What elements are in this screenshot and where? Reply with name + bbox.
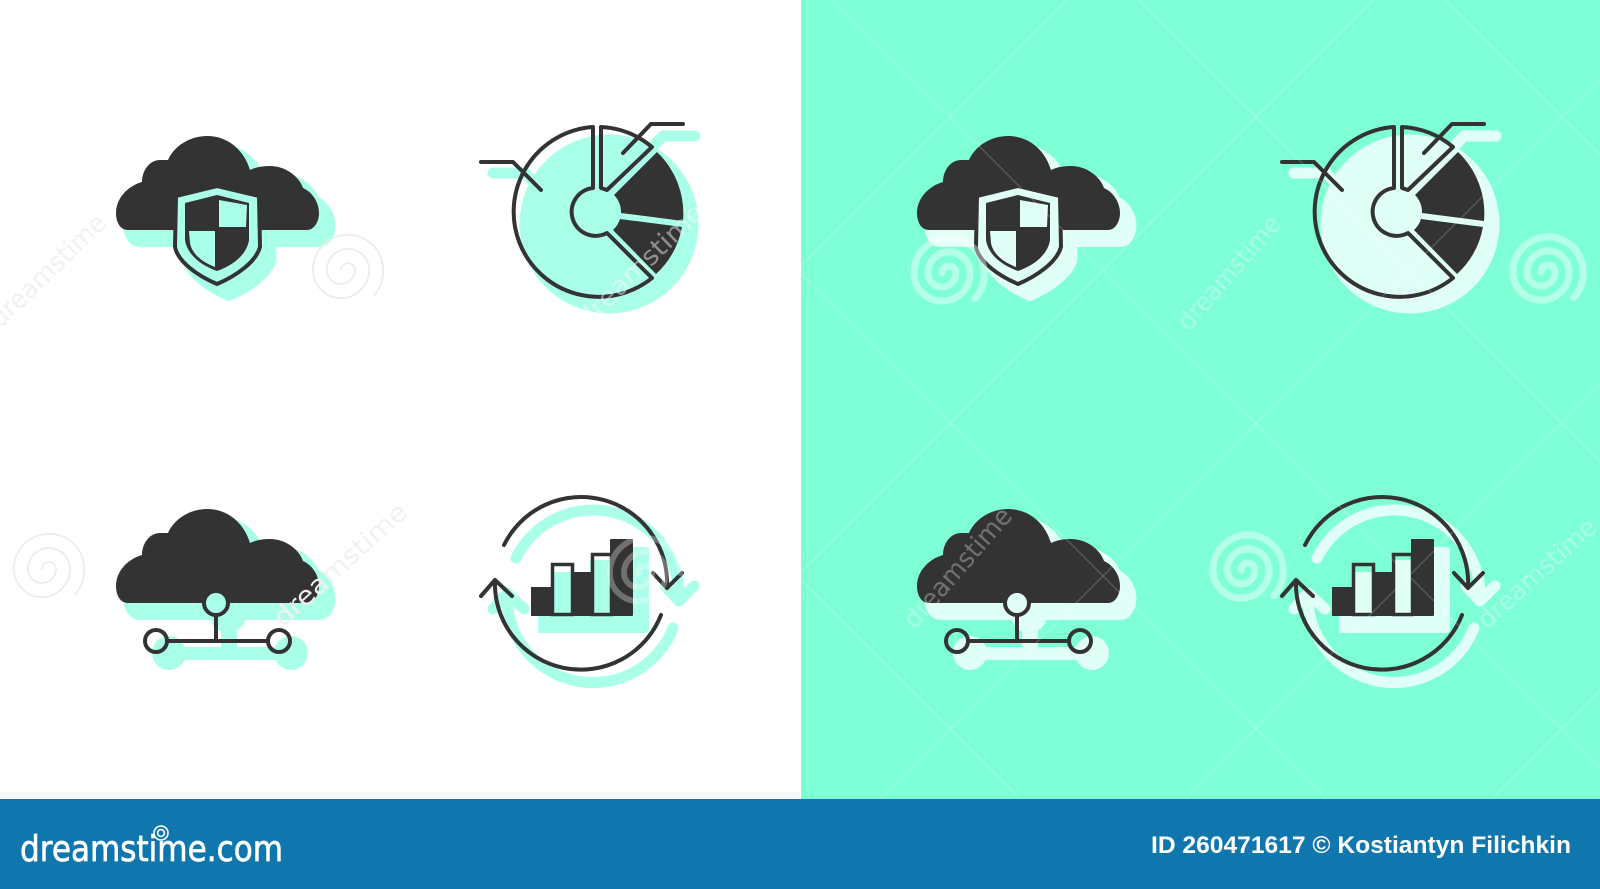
icon: refresh bar chart, right panel: [1282, 497, 1495, 683]
dark cloud: [116, 509, 319, 603]
shield top right quadrant: [219, 200, 247, 227]
watermark diagonal text: dreamstime: [571, 198, 711, 334]
shield bottom left quadrant: [189, 231, 215, 267]
right node: [1069, 630, 1091, 652]
left node: [145, 630, 167, 652]
pie dark slice upper: [614, 152, 683, 221]
bar chart dark steps: [1332, 539, 1434, 616]
chart shadow: [493, 510, 694, 683]
pie shadow: [1294, 134, 1500, 314]
dark cloud: [917, 136, 1120, 230]
right callout line: [623, 124, 683, 153]
clockwise arrow bottom: [1282, 580, 1462, 670]
connector lines: [970, 616, 1068, 641]
watermark diagonal text: dreamstime: [268, 497, 414, 633]
icon: cloud network, left panel: [116, 509, 331, 670]
pie dark slice upper: [1415, 152, 1484, 221]
shield outline: [976, 186, 1061, 284]
shield inner dark: [185, 195, 249, 271]
clockwise arrow top: [504, 497, 682, 588]
panel: aquamarine right background: [801, 0, 1600, 799]
dark cloud: [917, 509, 1120, 603]
network shadow: [929, 522, 1132, 670]
watermark diagonal text: [0, 198, 1600, 635]
pie top slice outline: [1402, 127, 1453, 190]
icon: pie chart, right panel: [1282, 124, 1500, 314]
icon: cloud with shield, left panel: [116, 136, 331, 296]
icon: refresh bar chart, left panel: [481, 497, 694, 683]
connector lines: [169, 616, 267, 641]
watermark diagonal text: dreamstime: [1172, 210, 1287, 337]
logo text: dreamstime.com: [20, 829, 283, 870]
left callout line: [1282, 162, 1342, 190]
icon: cloud with shield, right panel: [917, 136, 1132, 296]
shield bottom left quadrant: [990, 231, 1016, 267]
left callout line: [481, 162, 541, 190]
shield top right quadrant: [1020, 200, 1048, 227]
icon: pie chart, left panel: [481, 124, 698, 314]
right node: [268, 630, 290, 652]
icon: cloud network, right panel: [917, 509, 1132, 670]
top node: [204, 591, 228, 615]
shield inner dark: [986, 195, 1050, 271]
right callout line: [1424, 124, 1484, 153]
top node: [1005, 591, 1029, 615]
pie top slice outline: [601, 127, 652, 190]
pie shadow: [493, 134, 698, 314]
watermark spirals: [14, 235, 1583, 601]
footer bar: [0, 799, 1600, 889]
pie dark slice lower: [1414, 219, 1483, 274]
shield outline: [175, 186, 260, 284]
image id and credit: ID 260471617 © Kostiantyn Filichkin: [1151, 832, 1571, 859]
logo swirl icon: [154, 826, 168, 840]
clockwise arrow bottom: [481, 580, 661, 670]
pie large segment outline: [514, 127, 652, 297]
chart shadow: [1294, 510, 1495, 683]
panel: white left background: [0, 0, 801, 799]
cloud and shield shadow: [128, 148, 331, 296]
pie dark slice lower: [613, 219, 682, 274]
dark cloud: [116, 136, 319, 230]
pie large segment outline: [1315, 127, 1453, 297]
bar chart dark steps: [531, 539, 633, 616]
watermark diagonal text: dreamstime: [898, 502, 1019, 635]
network shadow: [128, 522, 331, 670]
clockwise arrow top: [1305, 497, 1483, 588]
left node: [946, 630, 968, 652]
cloud and shield shadow: [929, 148, 1132, 296]
